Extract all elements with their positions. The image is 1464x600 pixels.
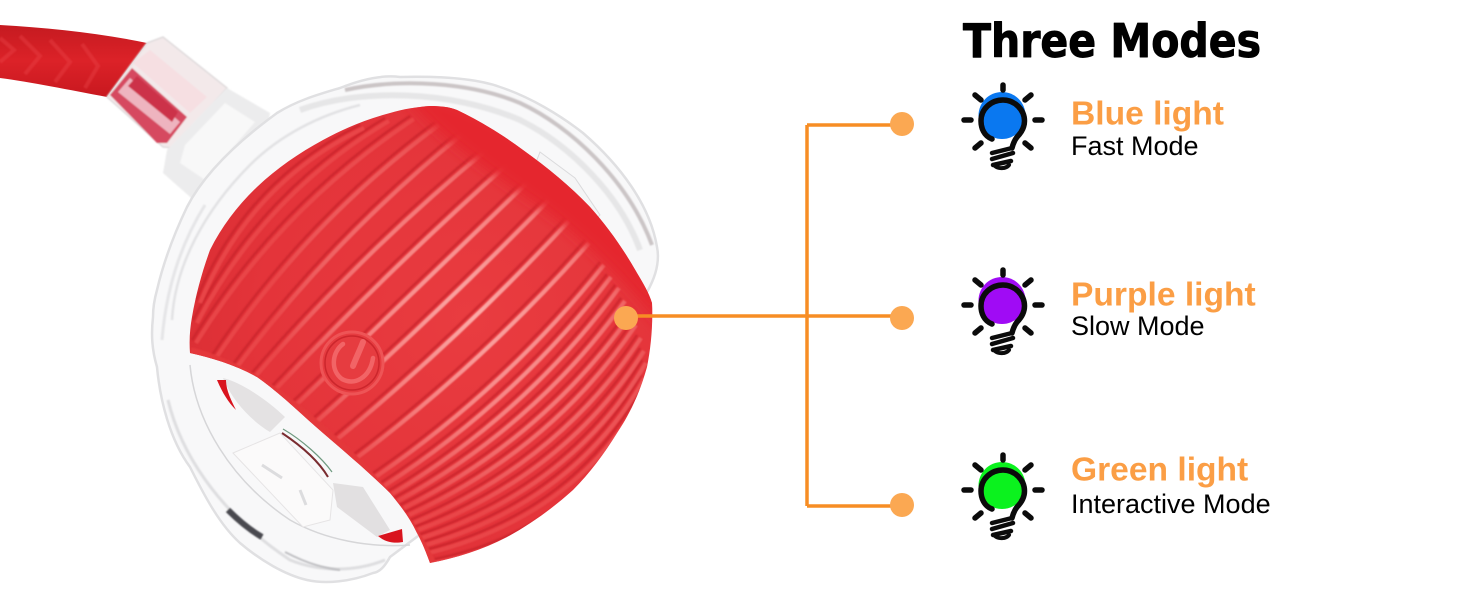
mode: purple light — [964, 270, 1256, 353]
power button icon — [321, 332, 383, 394]
metal disc upper — [223, 378, 285, 432]
red ribbed ball body — [190, 90, 665, 563]
rope — [0, 25, 147, 97]
label: interactive mode: Interactive Mode — [1071, 489, 1271, 519]
plain top-right band — [408, 106, 652, 322]
metal disc lower — [333, 483, 390, 537]
white collar — [163, 88, 270, 203]
icon: purple bulb — [964, 270, 1042, 353]
mode: blue light — [964, 85, 1224, 168]
product: red rope and ball — [0, 25, 665, 582]
title: Three Modes — [963, 14, 1261, 68]
icon: blue bulb — [964, 85, 1042, 168]
transparent shell — [152, 76, 658, 582]
label: purple light: Purple light — [1071, 276, 1256, 314]
clear connector clip — [107, 37, 270, 203]
label: fast mode: Fast Mode — [1071, 131, 1199, 161]
anchor dot on ball — [614, 306, 638, 330]
label: green light: Green light — [1071, 452, 1248, 488]
lower edge band — [190, 353, 430, 563]
connector lines — [614, 112, 914, 517]
label: slow mode: Slow Mode — [1071, 311, 1205, 341]
mode: green light — [964, 452, 1271, 538]
label: blue light: Blue light — [1071, 96, 1224, 132]
icon: green bulb — [964, 455, 1042, 538]
inner metal disc and lower clip — [217, 378, 403, 543]
dot: green — [890, 493, 914, 517]
dot: purple — [890, 306, 914, 330]
shell inner edge — [190, 365, 410, 546]
dot: blue — [890, 112, 914, 136]
